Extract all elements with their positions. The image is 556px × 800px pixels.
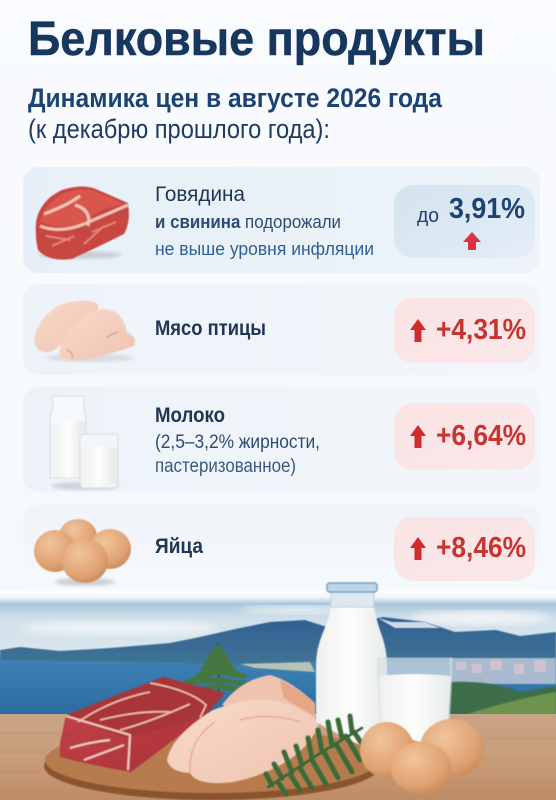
item text: eggs: Яйца xyxy=(155,535,203,558)
item text: beef xyxy=(155,183,374,259)
chicken xyxy=(167,675,319,783)
fern bottom xyxy=(266,716,366,794)
icon: beef xyxy=(36,186,129,260)
fern top xyxy=(186,644,246,695)
value badge: beef: до xyxy=(417,205,439,227)
plate xyxy=(44,727,380,800)
bottle of milk xyxy=(316,583,387,745)
panel: beef xyxy=(23,167,540,273)
item text: poultry: Мясо птицы xyxy=(155,317,266,340)
eggs xyxy=(360,719,484,794)
subtitle: Динамика цен в августе 2026 года xyxy=(28,83,443,113)
beef xyxy=(60,677,225,772)
value badge: milk: +6,64% xyxy=(436,420,526,452)
panel: milk xyxy=(23,387,540,492)
item text: milk: пастеризованное) xyxy=(155,456,296,477)
icon: milk bottle and glass xyxy=(50,396,119,490)
title: Белковые продукты xyxy=(28,13,485,66)
value badge: poultry: +4,31% xyxy=(436,314,526,346)
item text: beef: Говядина xyxy=(155,183,245,206)
subtitle: (к декабрю прошлого года): xyxy=(28,114,330,144)
value badge: eggs: +8,46% xyxy=(436,532,526,564)
icon: eggs xyxy=(34,519,131,586)
value badge: beef xyxy=(394,185,535,258)
subtitle xyxy=(28,83,443,144)
panel: poultry xyxy=(23,284,540,375)
arrow: up xyxy=(410,537,426,560)
value badge: milk xyxy=(394,403,535,470)
item text: beef: и свинина подорожали xyxy=(155,211,341,232)
item text: milk xyxy=(155,404,320,477)
arrow: up xyxy=(463,232,481,250)
arrow: up xyxy=(410,319,426,342)
panel: eggs xyxy=(23,505,540,605)
item text: beef: не выше уровня инфляции xyxy=(155,238,374,259)
landscape photo xyxy=(0,590,556,718)
item text: milk: Молоко xyxy=(155,404,225,427)
value badge: beef: 3,91% xyxy=(449,193,525,225)
arrow: up xyxy=(410,425,426,448)
icon: chicken xyxy=(34,300,135,362)
wooden table xyxy=(0,714,556,800)
glass of milk xyxy=(378,658,452,742)
value badge: eggs xyxy=(394,517,535,581)
item text: milk: (2,5–3,2% жирности, xyxy=(155,432,320,453)
value badge: poultry xyxy=(394,298,535,363)
